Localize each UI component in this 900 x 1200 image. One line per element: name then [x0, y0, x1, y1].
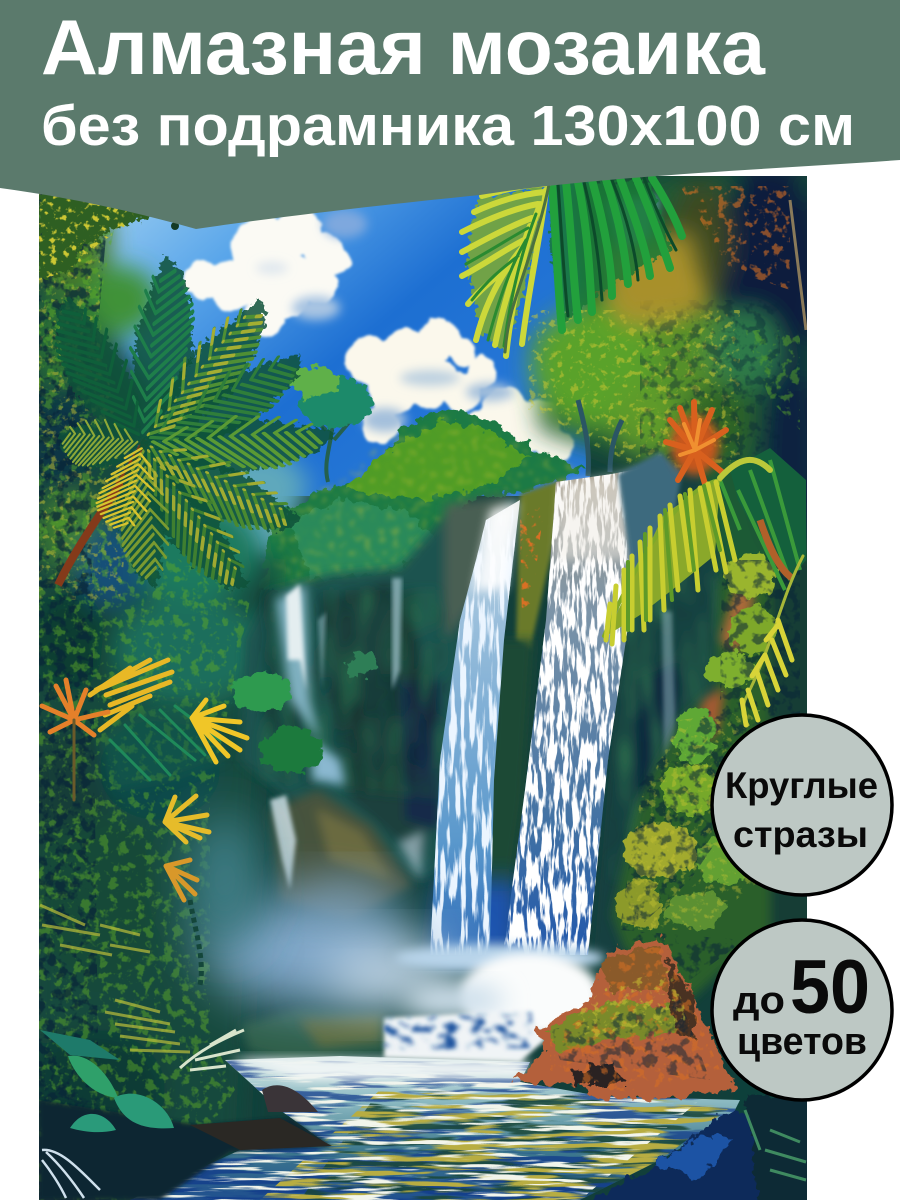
top right palm frond — [462, 178, 682, 356]
left forest leaf texture — [39, 190, 250, 1200]
clouds lower — [346, 318, 573, 463]
cloud shading — [256, 210, 367, 320]
white fern — [42, 1150, 100, 1198]
hazy distant forest behind palm — [170, 450, 310, 560]
green bushes at cliff — [232, 653, 378, 772]
pale fern tip — [180, 1030, 244, 1070]
dark hanging vines — [190, 900, 201, 985]
badge: round rhinestones: Круглые — [725, 765, 878, 806]
cliff behind small falls — [240, 495, 510, 880]
pool of water — [130, 1056, 740, 1200]
tree trunks — [578, 400, 622, 476]
main palm — [38, 254, 338, 608]
yellow fan upper — [90, 660, 172, 730]
right foliage texture — [620, 560, 800, 980]
teal leaves — [40, 1030, 174, 1132]
low mossy bank — [240, 1008, 386, 1062]
warm foliage behind frond — [600, 230, 710, 320]
blue rock shoulder right of falls — [614, 450, 684, 568]
badge: round rhinestones — [712, 715, 892, 895]
bottom left plants — [39, 900, 332, 1200]
mid forest band — [262, 408, 585, 600]
rear right wall — [612, 465, 722, 876]
right foliage clumps — [618, 553, 776, 931]
moss rock between falls — [430, 478, 565, 960]
badge: up to 50 colours: цветов — [737, 1021, 867, 1063]
boulder — [270, 790, 412, 920]
cloud large — [183, 208, 367, 338]
palm yellow highlights — [117, 294, 299, 597]
palm trunk — [58, 440, 146, 585]
left main waterfall — [430, 500, 520, 955]
palm green leaflets — [110, 706, 220, 780]
lower small falls — [270, 795, 296, 890]
upper right texture — [528, 186, 800, 470]
upper right jungle soft colours — [511, 176, 807, 579]
orange plant — [42, 680, 108, 800]
top left branch foliage — [39, 190, 179, 280]
striped plant highlights — [40, 905, 190, 1052]
yellow fan mid — [165, 796, 209, 842]
badge: up to 50 colours — [712, 920, 892, 1100]
yellow fan low — [166, 860, 197, 900]
right mid palm frond — [604, 460, 770, 644]
orange flower plant — [666, 402, 726, 484]
right foliage soft colours — [612, 560, 815, 1000]
far tree — [292, 366, 372, 482]
subtitle: без подрамника 130х100 см — [41, 94, 855, 158]
mist — [189, 810, 465, 1005]
yellow fan right — [192, 700, 247, 762]
right fan palm dark — [720, 448, 806, 590]
left forest soft colours — [10, 190, 280, 1200]
mid forest texture — [262, 408, 585, 590]
small fall near main falls — [398, 830, 424, 880]
bottom right dark rocks — [572, 1095, 815, 1200]
sky — [80, 176, 590, 496]
waterfall painting — [10, 160, 825, 1200]
right main waterfall — [504, 465, 636, 955]
sky glimpses behind frond — [606, 196, 660, 250]
palm frond leaflets — [43, 269, 323, 597]
small waterfall upper — [276, 578, 402, 785]
palm frond bodies — [38, 254, 338, 608]
title: Алмазная мозаика — [41, 3, 766, 91]
cliff vertical texture — [262, 590, 445, 800]
badge: round rhinestones: стразы — [733, 814, 868, 855]
lower left yellow palm — [90, 660, 247, 900]
orange rocks — [515, 938, 740, 1100]
lower cloud shading — [363, 370, 514, 432]
right edge vine — [790, 200, 806, 330]
base forest colour — [39, 176, 807, 1200]
right thin frond — [742, 556, 803, 725]
lower right dark trees — [720, 960, 815, 1200]
badge: up to 50 colours: 50 — [790, 945, 870, 1030]
header banner — [0, 0, 900, 229]
bottom right fern strokes — [745, 1110, 806, 1180]
palm green body — [100, 700, 225, 790]
badge: up to 50 colours: до — [733, 980, 785, 1022]
foam at falls base — [384, 944, 605, 1062]
